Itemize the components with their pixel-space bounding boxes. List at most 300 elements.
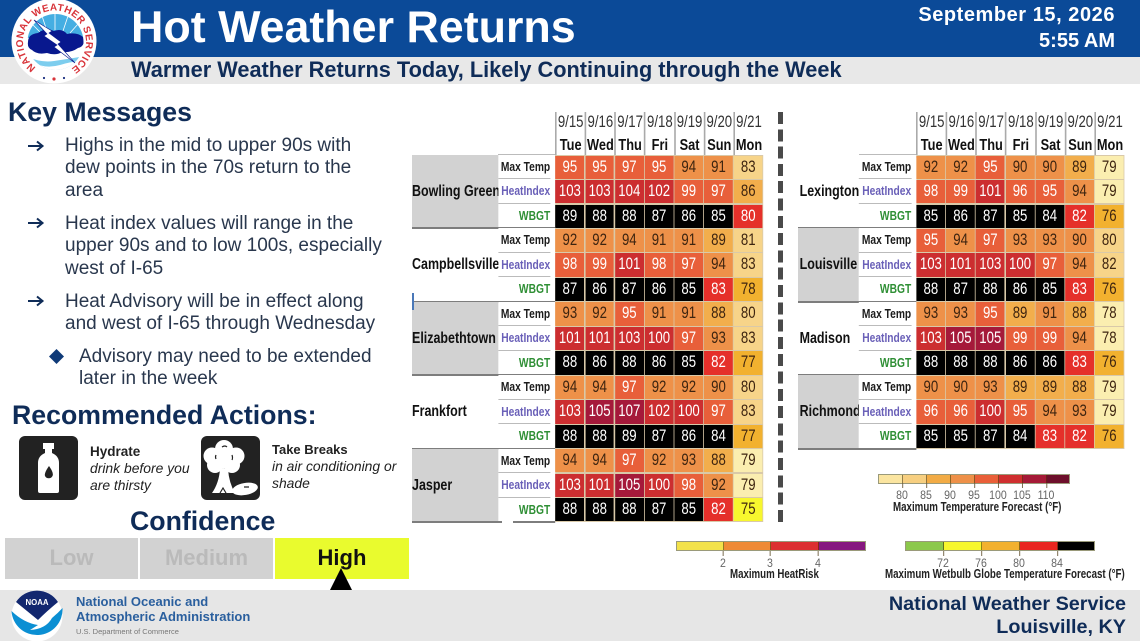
forecast cells: 104 bbox=[618, 182, 640, 200]
city name bbox=[412, 302, 498, 375]
NOAA wordmark bbox=[76, 594, 250, 636]
forecast cells: 105 bbox=[618, 476, 640, 494]
left table date header: Wed bbox=[587, 137, 614, 154]
text: hydrate: drink before you bbox=[90, 460, 190, 476]
forecast cells: 88 bbox=[563, 353, 577, 371]
row labels: Max Temp bbox=[862, 232, 911, 247]
forecast cells: 103 bbox=[559, 402, 581, 420]
forecast cells: 84 bbox=[711, 427, 726, 445]
date and time: 5:55 AM bbox=[1039, 30, 1115, 52]
forecast cells: 77 bbox=[741, 427, 756, 445]
forecast cells: 91 bbox=[681, 304, 696, 322]
forecast cells: 97 bbox=[711, 182, 726, 200]
forecast cells: 96 bbox=[924, 402, 938, 420]
forecast cells: 88 bbox=[1072, 378, 1087, 396]
legend title: Maximum HeatRisk bbox=[730, 567, 819, 581]
forecast cells: 82 bbox=[1072, 207, 1087, 225]
forecast cells: 88 bbox=[1072, 304, 1087, 322]
tick labels: 72 bbox=[937, 556, 949, 570]
key messages list bbox=[28, 135, 382, 389]
left table date header: 9/21 bbox=[736, 113, 762, 131]
forecast cells: 95 bbox=[592, 158, 607, 176]
forecast cells: 93 bbox=[983, 378, 998, 396]
tick labels: 84 bbox=[1051, 556, 1063, 570]
forecast cells: 87 bbox=[652, 500, 666, 518]
forecast cells: 99 bbox=[1013, 329, 1027, 347]
right table date header: 9/17 bbox=[978, 113, 1004, 131]
city name bbox=[798, 375, 859, 449]
heading: confidence: Confidence bbox=[130, 506, 275, 536]
left table date header: 9/20 bbox=[706, 113, 732, 131]
forecast cells: 79 bbox=[1102, 158, 1117, 176]
message: extension: later in the week bbox=[79, 368, 217, 389]
footer office name: Louisville, KY bbox=[996, 616, 1126, 638]
confidence low bbox=[5, 538, 138, 579]
city name: Bowling Green bbox=[412, 183, 500, 200]
left table date header: Thu bbox=[618, 137, 642, 154]
text: hydrate: are thirsty bbox=[90, 477, 151, 493]
forecast cells: 103 bbox=[920, 329, 942, 347]
row labels: Max Temp bbox=[501, 379, 550, 394]
icon: NOAA logo: NOAA bbox=[26, 598, 49, 607]
right table date header: 9/20 bbox=[1067, 113, 1093, 131]
forecast cells: 82 bbox=[1102, 255, 1117, 273]
confidence marker triangle bbox=[330, 568, 352, 590]
legend title: Maximum Wetbulb Globe Temperature Forecast (°F) bbox=[885, 567, 1125, 581]
forecast cells: 91 bbox=[711, 158, 726, 176]
footer office name: National Weather Service bbox=[889, 593, 1126, 615]
right table date header: Sun bbox=[1068, 137, 1092, 154]
forecast cells: 94 bbox=[592, 451, 607, 469]
forecast cells: 79 bbox=[741, 451, 756, 469]
forecast cells: 102 bbox=[648, 182, 670, 200]
forecast cells: 89 bbox=[1042, 378, 1057, 396]
icon: National Weather Service logo: NATIONAL WEATHER SERVICE bbox=[16, 4, 93, 74]
forecast cells bbox=[555, 155, 763, 228]
footer office name bbox=[889, 593, 1126, 638]
forecast cells bbox=[555, 228, 763, 302]
confidence high: High bbox=[318, 545, 366, 570]
forecast cells: 98 bbox=[563, 255, 577, 273]
forecast cells: 93 bbox=[1013, 231, 1027, 249]
arrow bullet 1 bbox=[28, 140, 44, 152]
forecast cells: 93 bbox=[953, 304, 968, 322]
forecast cells: 94 bbox=[563, 378, 577, 396]
forecast cells: 78 bbox=[741, 280, 756, 298]
panel: Richmond bbox=[798, 375, 1124, 449]
forecast cells: 88 bbox=[622, 353, 637, 371]
right table date header: Fri bbox=[1013, 137, 1029, 154]
forecast cells: 85 bbox=[924, 427, 938, 445]
colour bar bbox=[905, 541, 1095, 551]
forecast cells: 97 bbox=[681, 255, 696, 273]
subtitle: Warmer Weather Returns Today, Likely Continuing through the Week bbox=[131, 57, 842, 82]
NOAA wordmark: U.S. Department of Commerce bbox=[76, 627, 179, 636]
forecast cells: 85 bbox=[1013, 207, 1027, 225]
forecast cells: 103 bbox=[618, 329, 640, 347]
arrow bullet 2 bbox=[28, 218, 44, 228]
forecast cells: 80 bbox=[741, 378, 756, 396]
message: highs: dew points in the 70s return to the bbox=[65, 157, 351, 178]
colour bar bbox=[676, 541, 866, 551]
forecast cells: 90 bbox=[1042, 158, 1057, 176]
forecast cells: 92 bbox=[652, 451, 666, 469]
heading: key messages: Key Messages bbox=[8, 97, 192, 127]
forecast cells: 88 bbox=[983, 280, 998, 298]
forecast cells: 77 bbox=[741, 353, 756, 371]
row labels: Max Temp bbox=[501, 232, 550, 247]
legend title: Maximum Temperature Forecast (°F) bbox=[893, 500, 1061, 514]
row labels: Max Temp bbox=[501, 453, 550, 468]
panel: Elizabethtown bbox=[412, 302, 763, 375]
right table date header: 9/15 bbox=[919, 113, 945, 131]
tick labels: 76 bbox=[975, 556, 987, 570]
forecast cells bbox=[916, 375, 1124, 449]
forecast cells: 94 bbox=[1042, 402, 1057, 420]
forecast cells: 84 bbox=[1042, 207, 1057, 225]
row labels: WBGT bbox=[519, 428, 550, 443]
row labels bbox=[859, 155, 916, 228]
date and time: September 15, 2026 bbox=[918, 4, 1115, 26]
forecast cells: 87 bbox=[563, 280, 577, 298]
text: take breaks bbox=[272, 442, 397, 491]
forecast cells: 101 bbox=[589, 476, 611, 494]
forecast cells: 87 bbox=[622, 280, 637, 298]
forecast cells: 99 bbox=[1042, 329, 1057, 347]
message: highs: Highs in the mid to upper 90s with bbox=[65, 135, 351, 156]
forecast cells bbox=[916, 228, 1124, 302]
forecast cells: 89 bbox=[711, 231, 726, 249]
forecast cells: 88 bbox=[592, 207, 607, 225]
forecast cells: 83 bbox=[1042, 427, 1057, 445]
left table date header: Mon bbox=[736, 137, 762, 154]
forecast cells: 105 bbox=[950, 329, 972, 347]
row labels: HeatIndex bbox=[501, 183, 550, 198]
panel: Bowling Green bbox=[412, 155, 763, 228]
forecast cells bbox=[916, 302, 1124, 375]
forecast cells: 92 bbox=[681, 378, 696, 396]
forecast cells: 85 bbox=[924, 207, 938, 225]
city name: Frankfort bbox=[412, 403, 467, 420]
row labels bbox=[498, 302, 555, 375]
forecast cells bbox=[555, 302, 763, 375]
forecast cells: 101 bbox=[589, 329, 611, 347]
row labels: HeatIndex bbox=[501, 330, 550, 345]
right table date header: 9/21 bbox=[1097, 113, 1123, 131]
panel: Campbellsville bbox=[412, 228, 763, 302]
forecast cells: 83 bbox=[711, 280, 726, 298]
forecast cells: 91 bbox=[681, 231, 696, 249]
forecast cells: 82 bbox=[711, 353, 726, 371]
forecast cells: 76 bbox=[1102, 280, 1117, 298]
row labels: Max Temp bbox=[862, 306, 911, 321]
forecast cells: 100 bbox=[648, 476, 670, 494]
forecast cells: 88 bbox=[711, 451, 726, 469]
tick labels: 80 bbox=[1013, 556, 1025, 570]
row labels: HeatIndex bbox=[862, 404, 911, 419]
forecast cells: 82 bbox=[711, 500, 726, 518]
forecast cells: 88 bbox=[592, 427, 607, 445]
forecast cells: 83 bbox=[1072, 280, 1087, 298]
right table date header: Tue bbox=[921, 137, 943, 154]
right table date header: 9/19 bbox=[1038, 113, 1063, 131]
row labels: WBGT bbox=[880, 281, 911, 296]
forecast cells: 86 bbox=[681, 427, 696, 445]
forecast cells: 91 bbox=[652, 231, 666, 249]
forecast cells: 76 bbox=[1102, 427, 1117, 445]
message: heat advisory: and west of I-65 through Wednesday bbox=[65, 313, 375, 334]
forecast cells: 102 bbox=[648, 402, 670, 420]
forecast cells: 103 bbox=[559, 182, 581, 200]
forecast cells: 94 bbox=[622, 231, 637, 249]
forecast cells: 93 bbox=[924, 304, 938, 322]
tick labels bbox=[720, 551, 821, 570]
forecast cells bbox=[555, 375, 763, 449]
forecast cells: 100 bbox=[648, 329, 670, 347]
forecast cells: 99 bbox=[681, 182, 696, 200]
city name: Jasper bbox=[412, 477, 452, 494]
forecast cells: 105 bbox=[979, 329, 1001, 347]
dashed divider between tables bbox=[778, 112, 783, 522]
left table date header bbox=[555, 112, 762, 156]
forecast cells: 101 bbox=[559, 329, 581, 347]
row labels: Max Temp bbox=[862, 159, 911, 174]
forecast cells: 94 bbox=[953, 231, 968, 249]
left table date header: Sat bbox=[680, 137, 700, 154]
forecast cells: 83 bbox=[741, 402, 756, 420]
forecast cells: 92 bbox=[711, 476, 726, 494]
forecast cells: 85 bbox=[953, 427, 968, 445]
text: take breaks: Take Breaks bbox=[272, 442, 348, 457]
city name: Campbellsville bbox=[412, 256, 499, 273]
forecast cells: 89 bbox=[563, 207, 577, 225]
message: heat index: Heat index values will range in the bbox=[65, 213, 353, 234]
left table date header: 9/15 bbox=[558, 113, 584, 131]
forecast cells: 94 bbox=[1072, 182, 1087, 200]
panel: Frankfort bbox=[412, 375, 763, 449]
city name bbox=[798, 228, 859, 302]
tick labels: 105 bbox=[1013, 488, 1031, 502]
forecast cells: 92 bbox=[592, 231, 607, 249]
forecast cells: 79 bbox=[1102, 378, 1117, 396]
row labels: WBGT bbox=[519, 355, 550, 370]
forecast cells: 94 bbox=[711, 255, 726, 273]
row labels bbox=[859, 228, 916, 302]
row labels bbox=[498, 375, 555, 449]
forecast cells: 86 bbox=[681, 207, 696, 225]
message: highs bbox=[65, 135, 351, 201]
forecast cells: 86 bbox=[652, 353, 666, 371]
forecast cells: 95 bbox=[924, 231, 938, 249]
forecast cells: 79 bbox=[1102, 182, 1117, 200]
row labels bbox=[859, 375, 916, 449]
forecast cells: 82 bbox=[1072, 427, 1087, 445]
forecast cells: 90 bbox=[1072, 231, 1087, 249]
panel: Jasper bbox=[412, 449, 763, 522]
forecast cells: 93 bbox=[1042, 231, 1057, 249]
left table date header: Sun bbox=[707, 137, 731, 154]
row labels: HeatIndex bbox=[501, 257, 550, 272]
forecast cells: 93 bbox=[711, 329, 726, 347]
row labels: WBGT bbox=[519, 208, 550, 223]
forecast cells: 97 bbox=[622, 451, 637, 469]
forecast cells: 90 bbox=[953, 378, 968, 396]
left table date header: Fri bbox=[652, 137, 668, 154]
forecast cells: 101 bbox=[979, 182, 1001, 200]
text: take breaks: shade bbox=[272, 475, 310, 491]
forecast cells: 76 bbox=[1102, 207, 1117, 225]
right table date header: Thu bbox=[979, 137, 1003, 154]
row labels bbox=[859, 302, 916, 375]
row labels: HeatIndex bbox=[501, 404, 550, 419]
message: heat index: west of I-65 bbox=[65, 258, 163, 279]
tick labels: 85 bbox=[920, 488, 932, 502]
tick labels: 95 bbox=[968, 488, 980, 502]
forecast cells: 86 bbox=[1013, 280, 1027, 298]
NOAA wordmark: National Oceanic and bbox=[76, 594, 208, 609]
forecast cells: 101 bbox=[618, 255, 640, 273]
forecast cells: 88 bbox=[563, 427, 577, 445]
forecast cells: 87 bbox=[983, 427, 998, 445]
message: heat index bbox=[65, 213, 382, 279]
diamond bullet bbox=[49, 349, 64, 364]
message: extension bbox=[79, 346, 372, 389]
message: heat advisory bbox=[65, 290, 375, 334]
forecast cells: 83 bbox=[741, 255, 756, 273]
message: heat advisory: Heat Advisory will be in effect along bbox=[65, 290, 364, 312]
forecast cells: 78 bbox=[1102, 329, 1117, 347]
forecast cells: 97 bbox=[983, 231, 998, 249]
row labels bbox=[498, 228, 555, 302]
message: highs: area bbox=[65, 180, 103, 201]
legend: maximum temperature bbox=[878, 474, 1070, 514]
row labels bbox=[498, 155, 555, 228]
forecast cells: 85 bbox=[1042, 280, 1057, 298]
forecast cells: 85 bbox=[681, 500, 696, 518]
forecast cells: 80 bbox=[741, 304, 756, 322]
forecast cells: 91 bbox=[1042, 304, 1057, 322]
forecast cells: 88 bbox=[983, 353, 998, 371]
city name: Lexington bbox=[800, 183, 859, 200]
row labels: WBGT bbox=[880, 355, 911, 370]
icon: water bottle bbox=[19, 436, 78, 500]
forecast cells: 86 bbox=[1042, 353, 1057, 371]
forecast cells: 93 bbox=[1072, 402, 1087, 420]
icon: NOAA logo bbox=[12, 590, 63, 641]
right table date header: Mon bbox=[1097, 137, 1123, 154]
forecast cells: 80 bbox=[1102, 231, 1117, 249]
row labels: Max Temp bbox=[501, 159, 550, 174]
tick labels: 2 bbox=[720, 556, 726, 570]
forecast cells: 94 bbox=[1072, 255, 1087, 273]
left table date header: 9/18 bbox=[647, 113, 673, 131]
right table top rule bbox=[859, 154, 916, 155]
forecast cells: 88 bbox=[953, 353, 968, 371]
forecast cells: 95 bbox=[983, 304, 998, 322]
forecast cells: 100 bbox=[1009, 255, 1031, 273]
tick labels: 3 bbox=[767, 556, 773, 570]
forecast cells: 95 bbox=[983, 158, 998, 176]
arrow bullet 3 bbox=[28, 296, 44, 306]
legend: maximum WBGT bbox=[885, 541, 1125, 581]
forecast cells: 86 bbox=[592, 353, 607, 371]
forecast cells: 98 bbox=[681, 476, 696, 494]
left table date header: 9/16 bbox=[588, 113, 613, 131]
panel: Madison bbox=[798, 302, 1124, 375]
city name: Madison bbox=[800, 330, 850, 347]
forecast cells: 76 bbox=[1102, 353, 1117, 371]
forecast cells: 83 bbox=[741, 158, 756, 176]
forecast cells: 95 bbox=[563, 158, 577, 176]
forecast cells: 90 bbox=[711, 378, 726, 396]
header band bbox=[0, 0, 1140, 57]
forecast cells: 89 bbox=[622, 427, 637, 445]
forecast cells: 103 bbox=[559, 476, 581, 494]
forecast cells: 98 bbox=[924, 182, 938, 200]
forecast cells: 103 bbox=[979, 255, 1001, 273]
forecast cells: 88 bbox=[563, 500, 577, 518]
forecast cells: 100 bbox=[979, 402, 1001, 420]
forecast cells: 94 bbox=[592, 378, 607, 396]
forecast cells: 99 bbox=[592, 255, 607, 273]
row labels: WBGT bbox=[519, 281, 550, 296]
row labels: WBGT bbox=[880, 428, 911, 443]
message: extension: Advisory may need to be extended bbox=[79, 346, 372, 366]
forecast cells: 89 bbox=[1013, 304, 1027, 322]
forecast cells: 88 bbox=[711, 304, 726, 322]
row labels: WBGT bbox=[880, 208, 911, 223]
right table date header bbox=[916, 112, 1123, 158]
right table date header: Wed bbox=[948, 137, 975, 154]
forecast cells: 84 bbox=[1013, 427, 1027, 445]
text: hydrate: Hydrate bbox=[90, 444, 140, 459]
confidence high bbox=[275, 538, 409, 579]
forecast cells: 93 bbox=[563, 304, 577, 322]
tick labels bbox=[937, 551, 1063, 570]
row labels: HeatIndex bbox=[862, 257, 911, 272]
left table date header: 9/17 bbox=[617, 113, 643, 131]
forecast cells: 88 bbox=[622, 500, 637, 518]
forecast cells: 88 bbox=[622, 207, 637, 225]
right table date header: 9/18 bbox=[1008, 113, 1034, 131]
row labels: HeatIndex bbox=[862, 183, 911, 198]
city name: Richmond bbox=[800, 403, 861, 420]
forecast cells: 90 bbox=[924, 378, 938, 396]
forecast cells: 96 bbox=[953, 402, 968, 420]
forecast cells: 86 bbox=[953, 207, 968, 225]
date and time bbox=[918, 4, 1115, 52]
forecast cells: 79 bbox=[741, 476, 756, 494]
forecast cells: 93 bbox=[681, 451, 696, 469]
right table date header: 9/16 bbox=[949, 113, 974, 131]
forecast cells: 75 bbox=[741, 500, 756, 518]
forecast cells: 86 bbox=[652, 280, 666, 298]
forecast cells: 85 bbox=[681, 280, 696, 298]
forecast cells: 88 bbox=[592, 500, 607, 518]
row labels: Max Temp bbox=[862, 379, 911, 394]
forecast cells: 92 bbox=[924, 158, 938, 176]
forecast cells: 95 bbox=[622, 304, 637, 322]
forecast cells: 87 bbox=[983, 207, 998, 225]
forecast cells: 99 bbox=[953, 182, 968, 200]
city name: Elizabethtown bbox=[412, 330, 496, 347]
forecast cells: 86 bbox=[1013, 353, 1027, 371]
message: heat index: upper 90s and to low 100s, especially bbox=[65, 235, 382, 256]
forecast cells: 86 bbox=[592, 280, 607, 298]
forecast cells: 103 bbox=[920, 255, 942, 273]
forecast cells: 97 bbox=[1042, 255, 1057, 273]
forecast cells: 103 bbox=[589, 182, 611, 200]
